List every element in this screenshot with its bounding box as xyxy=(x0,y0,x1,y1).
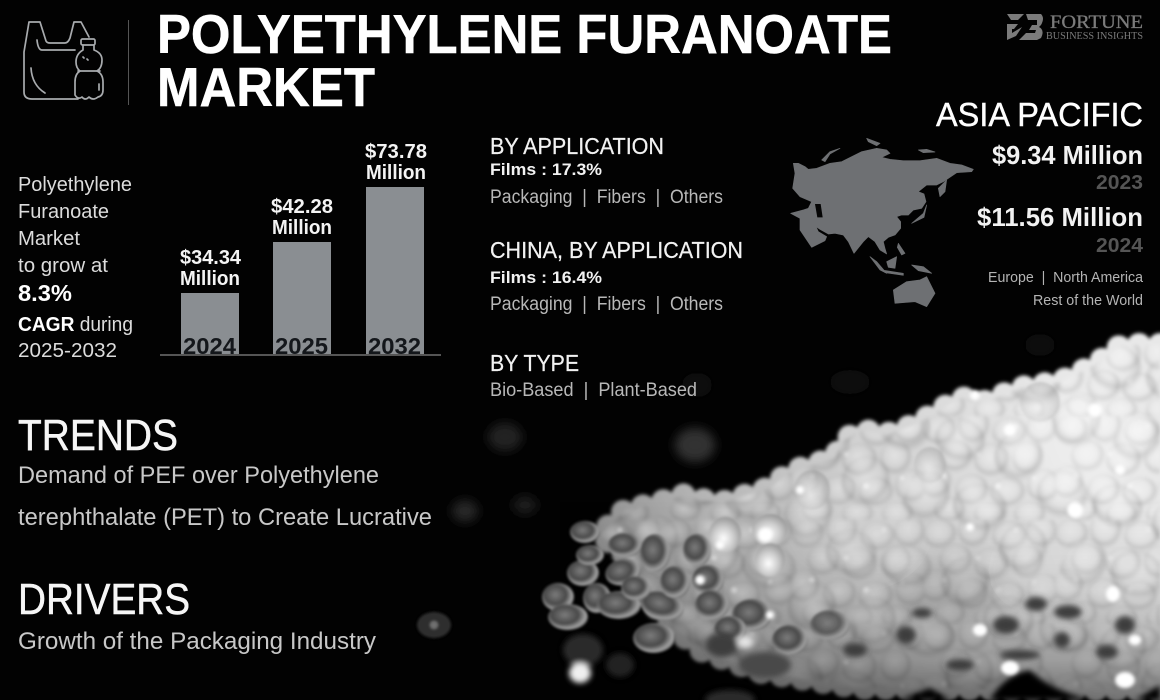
drivers: DRIVERS xyxy=(18,575,190,624)
logo: BUSINESS INSIGHTS xyxy=(1046,31,1143,42)
title: MARKET xyxy=(157,56,375,118)
logo xyxy=(1007,12,1143,42)
bar chart: 2032 xyxy=(368,333,421,359)
bar chart: 2025 xyxy=(275,333,328,359)
CAGR text block: Furanoate xyxy=(18,201,109,223)
bar chart: 2024 xyxy=(183,333,236,359)
logo: FORTUNE xyxy=(1050,12,1143,33)
segmentation: by application: Packaging | Fibers | Others xyxy=(490,187,723,208)
CAGR text block: Polyethylene xyxy=(18,174,132,196)
photo: polymer pellets pile xyxy=(417,330,1160,700)
regional stats: Asia Pacific: 2023 xyxy=(1096,172,1143,194)
bar chart xyxy=(160,141,441,359)
bar chart: Million xyxy=(272,217,332,239)
CAGR text block: CAGR during xyxy=(18,314,133,336)
divider xyxy=(128,20,129,105)
segmentation: by application xyxy=(490,133,723,208)
regional stats: Asia Pacific: $11.56 Million xyxy=(977,202,1143,232)
loose pellets xyxy=(542,382,1060,655)
regional stats: Asia Pacific: $9.34 Million xyxy=(992,140,1143,170)
segmentation: by type: BY TYPE xyxy=(490,350,579,376)
CAGR text block: 8.3% xyxy=(18,280,72,306)
trends: Demand of PEF over Polyethylene xyxy=(18,462,379,489)
bar chart: $34.34 xyxy=(180,247,242,269)
reflection pellets xyxy=(563,633,791,700)
broad light and shadow zones xyxy=(790,390,1150,620)
CAGR text block: to grow at xyxy=(18,255,108,277)
segmentation: China by application: Films : 16.4% xyxy=(490,268,602,287)
regional stats: Asia Pacific: Europe | North America xyxy=(988,269,1144,286)
trends xyxy=(18,411,432,531)
segmentation: China by application xyxy=(490,237,743,315)
title xyxy=(157,3,892,118)
segmentation: China by application: Packaging | Fibers | Others xyxy=(490,294,723,315)
CAGR text block xyxy=(18,174,133,362)
segmentation: by application: Films : 17.3% xyxy=(490,160,602,179)
dark gaps and glints in lower pile xyxy=(843,597,1160,700)
icon: bag and bottle xyxy=(24,22,103,99)
bar chart: $42.28 xyxy=(271,196,333,218)
stray droplet xyxy=(417,612,451,638)
segmentation: by type xyxy=(490,350,697,401)
segmentation: China by application: CHINA, BY APPLICATION xyxy=(490,237,743,263)
regional stats: Asia Pacific: ASIA PACIFIC xyxy=(936,96,1143,133)
CAGR text block: 2025-2032 xyxy=(18,340,117,362)
map: Asia Pacific xyxy=(791,138,973,307)
bar chart: $73.78 xyxy=(365,141,427,163)
CAGR text block: Market xyxy=(18,228,80,250)
drivers xyxy=(18,575,376,655)
segmentation: by application: BY APPLICATION xyxy=(490,133,664,159)
trends: terephthalate (PET) to Create Lucrative xyxy=(18,504,432,531)
title: POLYETHYLENE FURANOATE xyxy=(157,3,892,65)
regional stats: Asia Pacific xyxy=(936,96,1144,309)
segmentation: by type: Bio-Based | Plant-Based xyxy=(490,380,697,401)
drivers: Growth of the Packaging Industry xyxy=(18,628,376,655)
regional stats: Asia Pacific: Rest of the World xyxy=(1033,292,1143,309)
bar chart: Million xyxy=(180,268,240,290)
regional stats: Asia Pacific: 2024 xyxy=(1096,235,1144,257)
trends: TRENDS xyxy=(18,411,178,460)
bar chart: Million xyxy=(366,162,426,184)
